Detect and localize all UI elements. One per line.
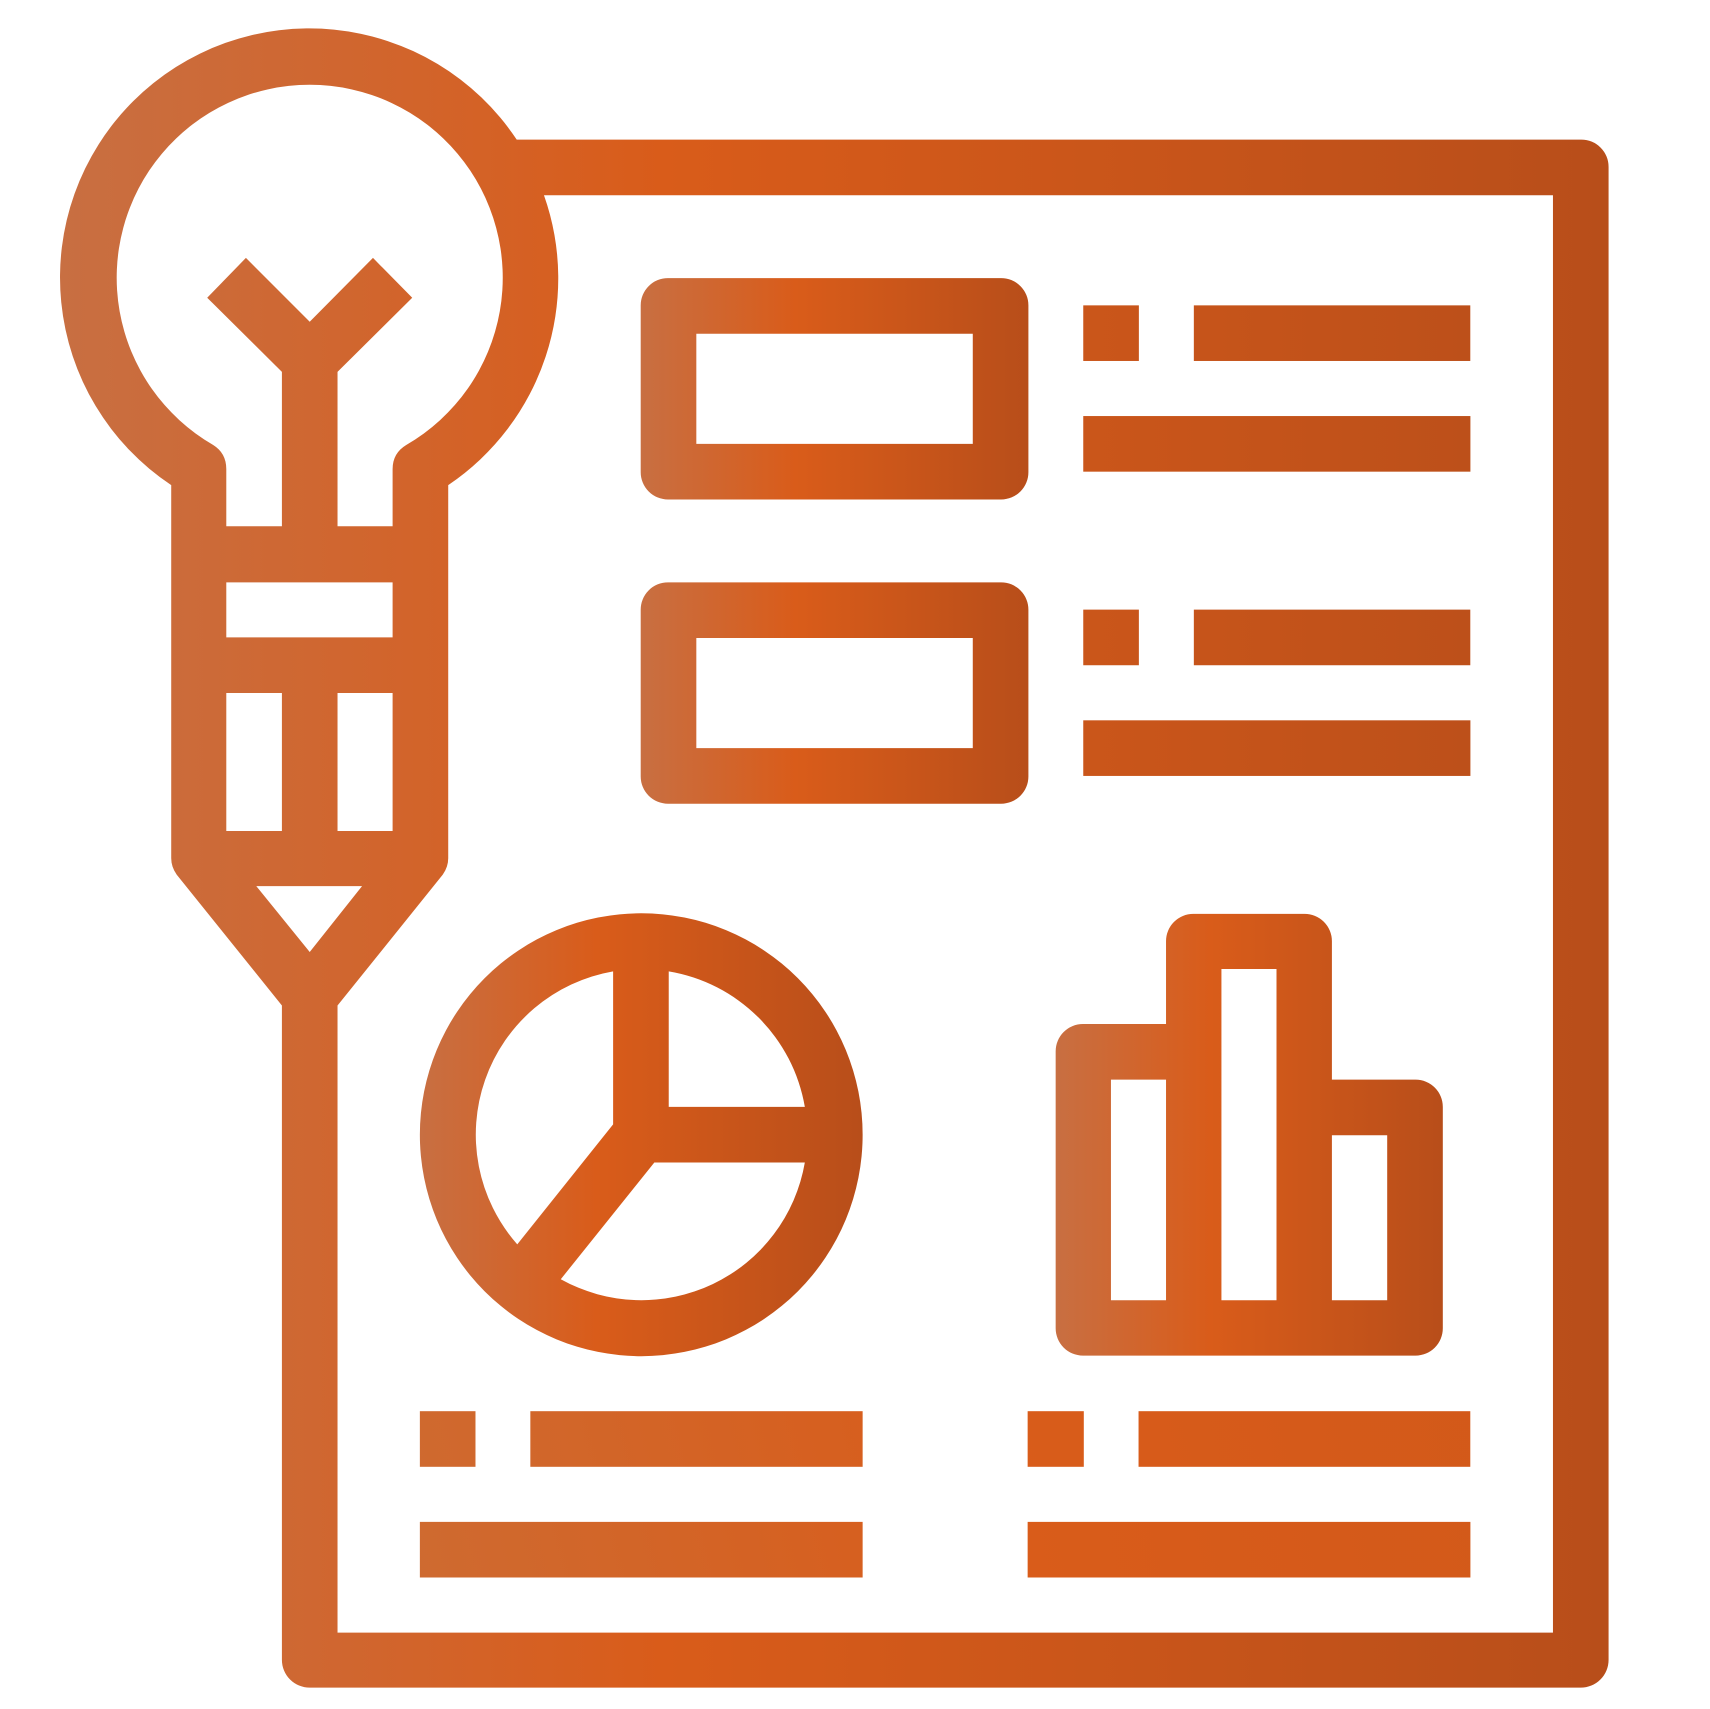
panel: second text lines xyxy=(1083,610,1470,776)
panel: second image box xyxy=(641,582,1028,804)
panel: bottom right text lines xyxy=(1028,1411,1470,1577)
pie chart xyxy=(420,913,863,1356)
bar chart xyxy=(1056,914,1443,1356)
panel: bottom left text lines xyxy=(420,1411,863,1577)
panel: top text lines xyxy=(1083,305,1470,472)
panel: top image box xyxy=(641,278,1028,499)
